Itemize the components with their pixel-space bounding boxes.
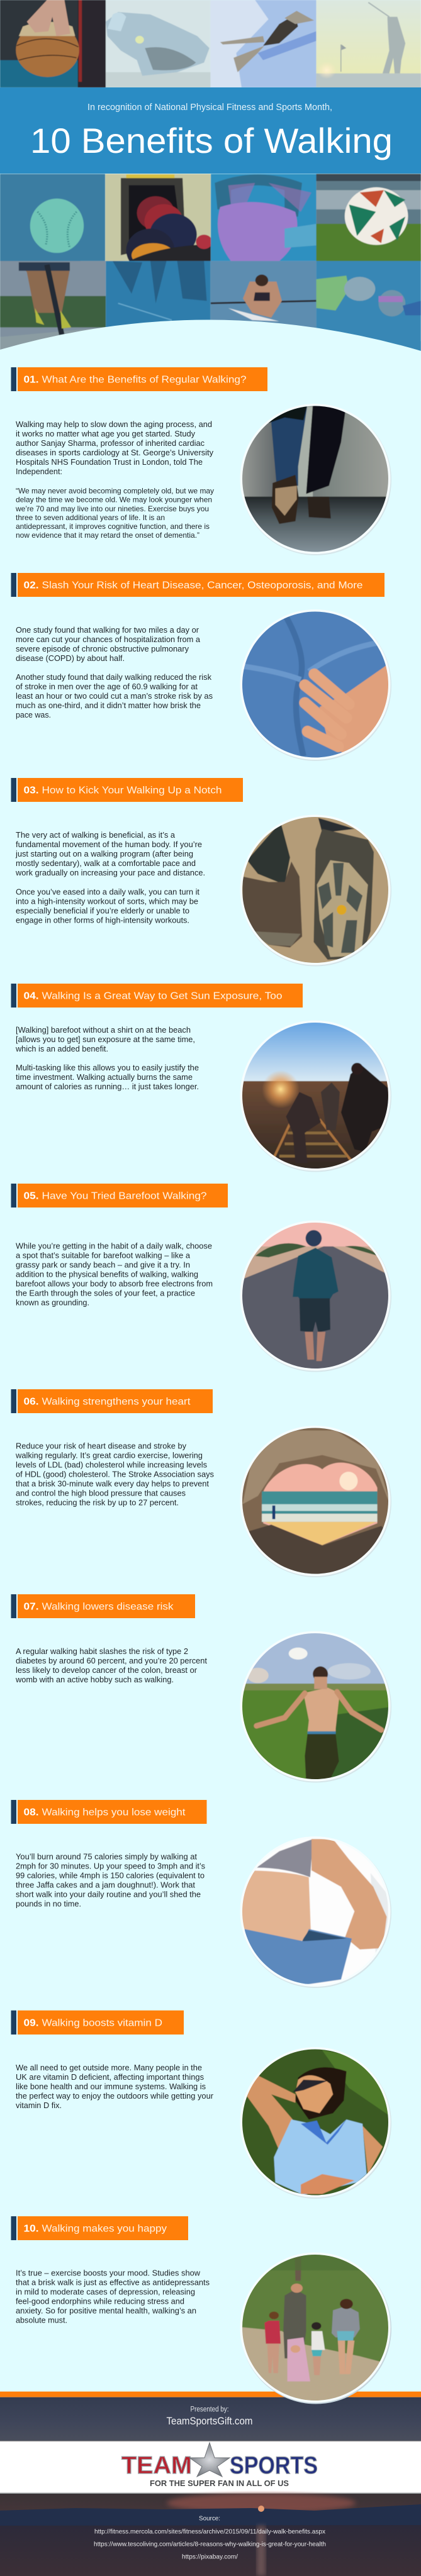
text block 01: Hospitals NHS Foundation Trust in London, told The	[16, 458, 203, 467]
heading 01	[11, 367, 267, 391]
text block 07: A regular walking habit slashes the risk of type 2	[16, 1647, 188, 1656]
photo: kettlebell	[211, 174, 317, 261]
subtitle: In recognition of National Physical Fitness and Sports Month,	[87, 103, 332, 113]
text block 02: One study found that walking for two miles a day or	[16, 626, 199, 635]
heading 08	[11, 1800, 206, 1824]
text block 04	[15, 1026, 199, 1091]
heading 09	[11, 2011, 184, 2035]
photo: family walking with stroller	[240, 2253, 391, 2404]
text block 10: that a brisk walk is just as effective as antidepressants	[16, 2278, 210, 2287]
text block 09: UK are vitamin D deficient, affecting important things	[16, 2073, 204, 2082]
photo: woman in sunglasses lying on grass	[239, 2046, 392, 2199]
text block 02: Another study found that daily walking reduced the risk	[16, 673, 212, 682]
text block 08: 99 calories, while 4mph is 150 calories (equivalent to	[16, 1872, 205, 1880]
text block 05: known as grounding.	[16, 1298, 89, 1307]
heading 07	[11, 1594, 195, 1618]
text block 07: womb with an active hobby such as walking.	[15, 1675, 174, 1684]
section 09	[11, 2011, 392, 2199]
panel: header photo collage	[0, 0, 421, 353]
text block 01: three to seven additional years of life. It is an	[16, 513, 165, 522]
logo: team sports: TEAM	[121, 2452, 192, 2479]
photo: swimmer	[210, 0, 317, 87]
heading 06: 06.	[24, 1396, 39, 1407]
text block 09	[16, 2063, 213, 2110]
heading 07: 07.	[24, 1601, 39, 1613]
photo: runners	[105, 260, 211, 327]
text block 04: [Walking] barefoot without a shirt on at the beach	[16, 1026, 191, 1035]
text block 08: 2mph for 30 minutes. Up your speed to 3mph and it’s	[16, 1862, 205, 1871]
text block 01: Walking may help to slow down the aging process, and	[16, 420, 212, 429]
source links: http://fitness.mercola.com/sites/fitness/archive/2015/09/11/daily-walk-benefits.aspx	[94, 2528, 326, 2536]
logo: team sports: FOR THE SUPER FAN IN ALL OF US	[150, 2479, 289, 2488]
text block 03: Once you’ve eased into a daily walk, you can turn it	[16, 888, 200, 897]
photo: softball	[0, 174, 105, 261]
text block 01: delay the time we become old. We may look younger when	[16, 496, 212, 504]
heading 02	[11, 573, 385, 597]
text block 02	[16, 626, 213, 719]
section 08	[11, 1800, 392, 1990]
text block 09: the perfect way to enjoy the outdoors while getting your	[16, 2092, 213, 2101]
text block 02: of stroke in men over the age of 60.9 walking for at	[16, 682, 198, 691]
text block 03: engage in other forms of high-intensity workouts.	[16, 916, 189, 924]
heading 06	[11, 1389, 213, 1413]
heading 08: Walking helps you lose weight	[42, 1807, 186, 1818]
text block 02: pace was.	[16, 711, 51, 719]
text block 08: three Jaffa cakes and a jam doughnut!). Work that	[16, 1881, 196, 1890]
photo: walking legs in corridor	[239, 401, 392, 557]
photo: hiking boots	[239, 814, 392, 969]
heading 04	[11, 984, 303, 1008]
text block 05: grassy park or sandy beach – and give it a try. In	[16, 1260, 190, 1269]
text block 02: disease (COPD) by about half.	[16, 654, 125, 663]
text block 05	[16, 1241, 213, 1307]
section 06	[11, 1389, 392, 1580]
text block 06	[15, 1442, 214, 1507]
text block 01: it works no matter what age you get started. Study	[16, 430, 196, 438]
text block 05: barefoot allows your body to absorb free electrons from	[16, 1279, 213, 1288]
text block 06: of HDL (good) cholesterol. The Stroke Association says	[16, 1470, 214, 1479]
text block 09: vitamin D fix.	[16, 2101, 62, 2110]
heading 01: What Are the Benefits of Regular Walking?	[42, 375, 247, 385]
source links	[94, 2528, 326, 2561]
text block 08	[16, 1853, 205, 1909]
title: 10 Benefits of Walking	[30, 121, 393, 160]
heading 10: 10.	[24, 2224, 39, 2234]
heading 09: 09.	[24, 2018, 39, 2029]
heading 06: Walking strengthens your heart	[42, 1396, 191, 1407]
heading 05	[11, 1184, 228, 1208]
photo: cyclist	[0, 261, 106, 353]
heading 09: Walking boosts vitamin D	[42, 2018, 162, 2029]
text block 08: pounds in no time.	[16, 1900, 81, 1909]
heading 02: 02.	[24, 580, 39, 591]
text block 10: feel-good endorphins while reducing stress and	[16, 2297, 184, 2306]
presented by label: Presented by:	[190, 2406, 229, 2414]
text block 05: the Earth through the soles of your feet, a practice	[16, 1289, 195, 1297]
footer: orange stripe	[0, 2392, 421, 2397]
website name: TeamSportsGift.com	[166, 2416, 253, 2427]
text block 01: we’re 70 and may live into our nineties. Exercise buys you	[15, 504, 209, 513]
text block 08: You’ll burn around 75 calories simply by walking at	[16, 1853, 198, 1862]
text block 10: in mild to moderate cases of depression, releasing	[16, 2288, 195, 2297]
text block 09: We all need to get outside more. Many people in the	[16, 2063, 202, 2072]
text block 03: fundamental movement of the human body. If you’re	[16, 840, 202, 849]
text block 07	[15, 1647, 208, 1684]
text block 10	[16, 2269, 210, 2324]
text block 04: time investment. Walking actually burns the same	[16, 1073, 193, 1082]
text block 10: anxiety. So for positive mental health, walking’s an	[16, 2307, 196, 2316]
heading 03	[11, 778, 243, 802]
text block 05: a spot that’s suitable for barefoot walking – like a	[16, 1251, 190, 1260]
text block 03: just starting out on a walking program (after being	[15, 850, 193, 858]
heading 08: 08.	[24, 1807, 39, 1818]
text block 01: antidepressant, it improves cognitive function, and there is	[16, 522, 210, 531]
photo: bowling balls	[104, 174, 211, 262]
text block 06: Reduce your risk of heart disease and stroke by	[16, 1442, 187, 1451]
heading 07: Walking lowers disease risk	[42, 1601, 174, 1613]
photo: push-ups	[317, 261, 421, 353]
footer: presented-by panel	[0, 2397, 421, 2441]
logo: team sports: SPORTS	[230, 2452, 318, 2479]
text block 01: now evidence that it may retard the onset of dementia.”	[16, 531, 199, 540]
photo: people walking on rail tracks at sunset	[239, 1018, 392, 1174]
text block 06: and control the high blood pressure that causes	[16, 1489, 186, 1498]
heading 05: 05.	[24, 1191, 39, 1201]
footer: logo band	[0, 2441, 421, 2494]
text block 02: severe episode of chronic obstructive pulmonary	[16, 645, 189, 653]
heading 02: Slash Your Risk of Heart Disease, Cancer, Osteoporosis, and More	[42, 580, 363, 591]
text block 08: short walk into your daily routine and you’ll shed the	[16, 1890, 201, 1899]
text block 01: Independent:	[16, 467, 62, 476]
photo: basketball	[0, 0, 106, 87]
text block 06: strokes, reducing the risk by up to 27 percent.	[16, 1499, 179, 1507]
heading 03: 03.	[24, 785, 39, 796]
text block 07: diabetes by around 60 percent, and you’re 20 percent	[16, 1657, 208, 1665]
text block 06: walking regularly. It’s great cardio exercise, lowering	[15, 1452, 203, 1460]
text block 01	[15, 420, 214, 540]
text block 04: which is an added benefit.	[15, 1045, 108, 1053]
text block 10: It’s true – exercise boosts your mood. Studies show	[16, 2269, 201, 2278]
photo: waist in loose jeans	[239, 1835, 392, 1990]
source label: Source:	[199, 2514, 220, 2522]
text block 04: amount of calories as running… it just takes longer.	[16, 1082, 199, 1091]
heading 04: Walking Is a Great Way to Get Sun Exposure, Too	[42, 991, 283, 1001]
section 10	[11, 2216, 210, 2324]
footer: sources panel over sunset	[0, 2493, 421, 2576]
heading 10: Walking makes you happy	[42, 2224, 167, 2234]
section 02	[11, 573, 395, 762]
source links: https://pixabay.com/	[182, 2553, 238, 2561]
text block 03: especially beneficial if you’re elderly or unable to	[16, 907, 189, 916]
text block 01: author Sanjay Sharma, professor of inherited cardiac	[16, 439, 205, 448]
section 05	[11, 1184, 392, 1375]
text block 02: least an hour or two could cut a man’s stroke risk by as	[16, 692, 213, 701]
banner: blue title band	[0, 87, 421, 174]
text block 05: addition to the physical benefits of walking, walking	[16, 1270, 198, 1279]
text block 06: that a brisk 30-minute walk every day helps to prevent	[16, 1480, 210, 1489]
section 04	[11, 984, 392, 1174]
text block 02: much as one-third, and it didn’t matter how brisk the	[16, 701, 201, 710]
photo: motorcycle racer	[106, 0, 210, 87]
text block 03: The very act of walking is beneficial, as it’s a	[16, 831, 175, 840]
text block 02: more can cut your chances of hospitalization from a	[16, 635, 200, 644]
heading 04: 04.	[24, 991, 39, 1001]
section 03	[11, 778, 392, 969]
heading 03: How to Kick Your Walking Up a Notch	[42, 785, 222, 796]
heading 01: 01.	[24, 375, 39, 385]
text block 01: diseases in sports cardiology at St. George’s University	[16, 448, 214, 457]
photo: man walking through tall grass	[239, 1630, 392, 1782]
heading 10	[11, 2216, 188, 2240]
photo: hand on chest	[239, 606, 395, 762]
text block 04: Multi-tasking like this allows you to easily justify the	[16, 1063, 199, 1072]
curved page background edge	[0, 319, 421, 402]
logo: team sports	[121, 2443, 318, 2488]
text block 09: like bone health and our immune systems. Walking is	[16, 2082, 206, 2091]
text block 06: levels of LDL (bad) cholesterol while increasing levels	[16, 1461, 207, 1470]
text block 03: work gradually on increasing your pace and distance.	[15, 869, 205, 877]
text block 04: [allows you to get] sun exposure at the same time,	[16, 1035, 195, 1044]
photo: heart-shaped cave opening on beach	[239, 1425, 392, 1580]
photo: golfer at sunset	[317, 0, 421, 87]
photo: soccer ball	[317, 174, 421, 261]
photo: rowers	[210, 260, 317, 328]
text block 07: less likely to develop cancer of the colon, breast or	[16, 1666, 197, 1675]
section 07	[11, 1594, 392, 1782]
text block 03	[15, 831, 205, 924]
section 01	[11, 367, 392, 557]
source links: https://www.tescoliving.com/articles/8-reasons-why-walking-is-great-for-your-health	[94, 2541, 326, 2548]
text block 01: “We may never avoid becoming completely old, but we may	[16, 487, 214, 496]
text block 05: While you’re getting in the habit of a daily walk, choose	[16, 1241, 212, 1250]
text block 03: mostly sedentary), walk at a comfortable pace and	[16, 859, 196, 868]
heading 05: Have You Tried Barefoot Walking?	[42, 1191, 207, 1201]
photo: man walking barefoot on road	[239, 1219, 392, 1375]
text block 10: absolute must.	[16, 2316, 67, 2324]
text block 03: into a high-intensity workout of sorts, which may be	[16, 897, 198, 906]
